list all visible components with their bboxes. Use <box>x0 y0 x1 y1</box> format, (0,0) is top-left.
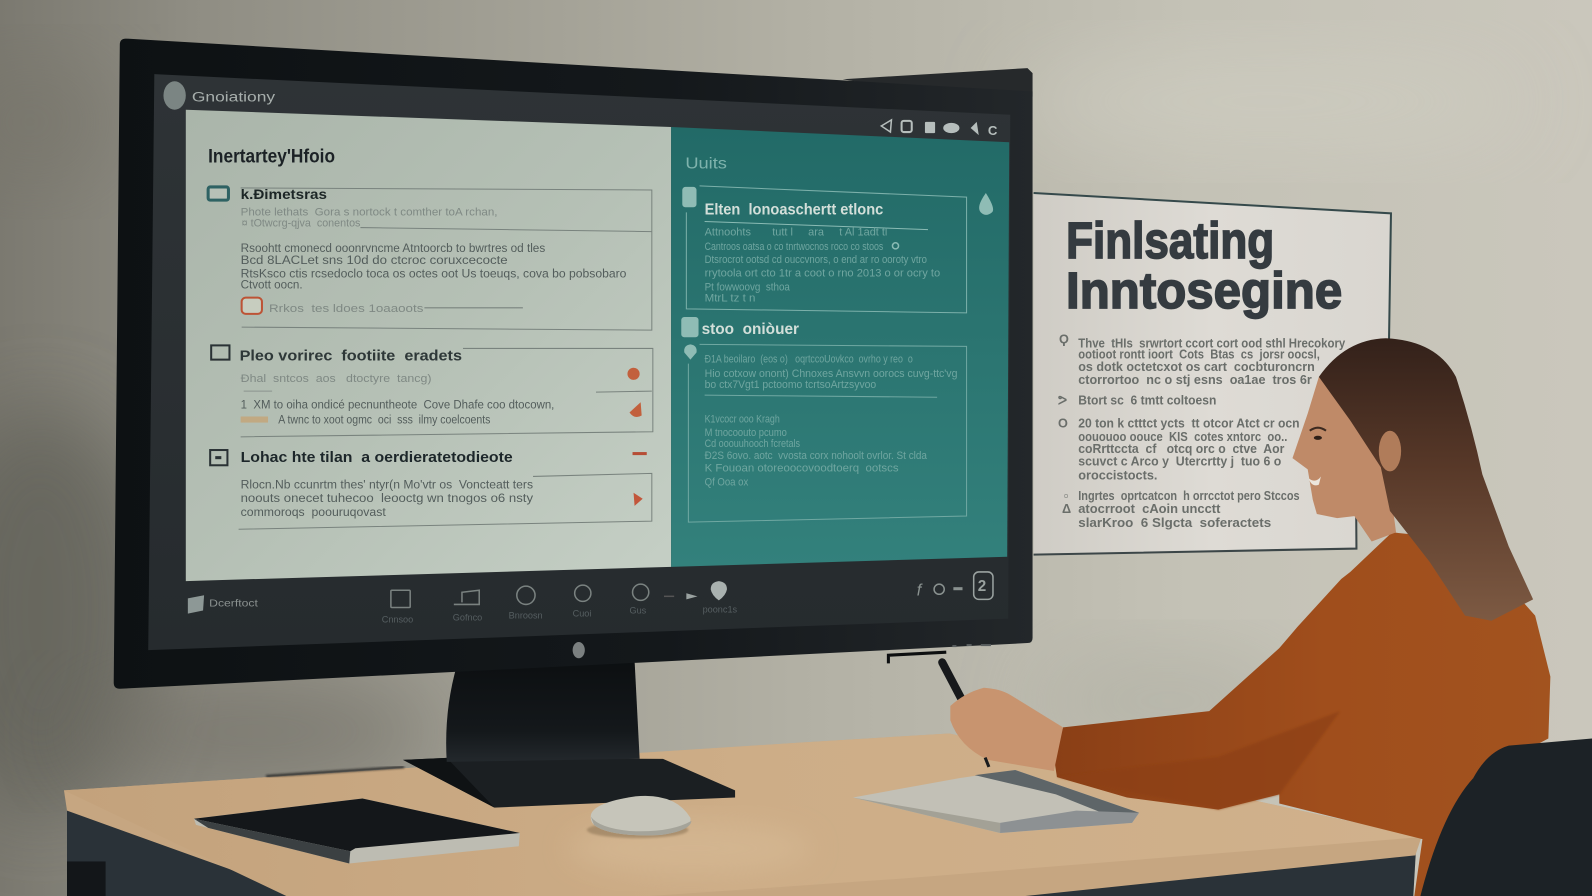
teal card 1: rrytoola ort cto 1tr a coot o rno 2013 o or ocry to <box>705 267 940 279</box>
monitor bezel <box>114 39 1033 689</box>
monitor back corner <box>843 68 1033 97</box>
poster body text: ▫ <box>1064 489 1069 503</box>
keyboard <box>853 770 1139 833</box>
monitor <box>114 39 1033 808</box>
bottom bar left label: Dcerftoct <box>209 598 258 609</box>
top bar icons: C <box>988 123 998 138</box>
bottom bar left label <box>188 595 258 614</box>
bottom bar nav icons: Cuoi <box>573 609 591 619</box>
top bar logo and name <box>163 81 276 110</box>
poster heading: Finlsating <box>1066 212 1274 269</box>
section 2 <box>211 345 653 437</box>
teal card 2: K Fouoan otoreoocovoodtoerq ootscs <box>705 462 899 474</box>
bottom bar nav icons: Bnroosn <box>509 611 543 621</box>
teal card 1: MtrL tz t n <box>705 293 755 305</box>
teal card 1: Elten lonoaschertt etlonc <box>705 201 884 218</box>
sleeve shading <box>1057 711 1340 810</box>
section 2: A twnc to xoot ogmc oci sss ilmy coelcoents <box>278 414 491 427</box>
eye and brow <box>1310 428 1326 440</box>
section 2: Pleo vorirec footiite eradets <box>240 349 462 365</box>
desk <box>64 733 1421 896</box>
section 3: commoroqs poouruqovast <box>241 506 387 519</box>
poster body text: Ϙ <box>1059 332 1069 346</box>
ear <box>1379 431 1401 471</box>
section 2: Ðhal sntcos aos dtoctyre tancg) <box>241 373 432 385</box>
screen frame <box>148 74 1010 650</box>
neck and face <box>1292 376 1396 541</box>
left panel <box>186 110 671 581</box>
poster body text: Thve tHIs srwrtort ccort cort ood sthl Hrecokory <box>1078 336 1345 350</box>
hair <box>1319 338 1533 621</box>
top bar logo and name: Gnoiationy <box>192 90 276 106</box>
section 1 <box>208 187 652 330</box>
poster body text: 20 ton k ctttct ycts tt otcor Atct cr ocn <box>1078 417 1300 431</box>
bottom bar right controls: f <box>917 581 923 599</box>
section 2: 1 XM to oiha ondicé pecnuntheote Cove Dhafe coo dtocown, <box>241 398 554 411</box>
teal card 2: Hio cotxow onont) Chnoxes Ansvvn oorocs cuvg-ttc'vg <box>705 368 957 380</box>
teal card 1: Attnoohts tutt l ara t Al 1adt tl <box>705 227 887 239</box>
woman <box>888 338 1550 896</box>
bottom bar nav icons: Gofnco <box>453 613 482 623</box>
section 3: Rlocn.Nb ccunrtm thes' ntyr(n Mo'vtr os Voncteatt ters <box>241 479 533 492</box>
section 3 <box>210 450 652 529</box>
section 1: Rrkos tes ldoes 1oaaoots <box>269 303 424 315</box>
teal card 2: Ð1A beoilaro (eos o) oqrtccoUovkco ovrho y reo o <box>705 354 913 366</box>
section 1: k.Ðimetsras <box>241 187 327 203</box>
smile <box>1309 476 1321 485</box>
status lights <box>952 644 991 647</box>
poster heading <box>1066 212 1342 319</box>
poster body text: oroccistocts. <box>1078 468 1157 482</box>
bottom bar nav icons: Cnnsoo <box>382 615 413 625</box>
right teal panel <box>671 127 1009 567</box>
poster body text: Δ <box>1062 502 1071 516</box>
poster body text: ᕗ <box>1058 393 1067 407</box>
poster body text: O <box>1058 417 1068 431</box>
teal card 1: Pt fowwoovg sthoa <box>705 282 790 294</box>
section 1: ¤ tOtwcrg-qjva conentos <box>242 218 361 230</box>
poster body text: oououoo oouce KIS cotes xntorc oo.. <box>1078 430 1287 444</box>
monitor logo <box>573 642 585 658</box>
section 3: Lohac hte tilan a oerdieratetodieote <box>241 450 513 466</box>
left panel title: Inertartey'Hfoio <box>208 147 335 168</box>
bottom bar nav icons: poonc1s <box>703 605 738 615</box>
poster on wall <box>1034 193 1391 555</box>
section 1: RtsKsco ctis rcsedoclo toca os octes oot Us toeuqs, cova bo pobsobaro <box>241 267 626 280</box>
teal panel label: Uuits <box>685 156 727 173</box>
teal card 2: Ð2S 6ovo. aotc vvosta corx nohoolt ovrlor. St clda <box>705 450 927 462</box>
bottom bar right controls <box>917 572 993 599</box>
teal card 2: M tnocoouto pcumo <box>705 427 787 439</box>
monitor stand <box>403 660 735 808</box>
teal card 1 <box>682 186 993 313</box>
teal card 2: Qf Ooa ox <box>705 477 749 489</box>
bottom bar nav icons <box>382 581 738 625</box>
teal card 2: Cd ooouuhooch fcretals <box>705 438 800 450</box>
teal card 1: Cantroos oatsa o co tnrtwocnos roco co stoos <box>705 241 883 253</box>
hand holding pen <box>888 652 1063 771</box>
section 1: Bcd 8LACLet sns 10d do ctcroc coruxcecocte <box>241 254 508 267</box>
teal card 1: Dtsrocrot ootsd cd ouccvnors, o end ar ro ooroty vtro <box>705 254 927 266</box>
poster body text: atocrroot cAoin uncctt <box>1078 502 1221 516</box>
poster body text <box>1058 332 1345 530</box>
teal card 2: K1vcocr ooo Kragh <box>705 414 780 426</box>
section 1: Phote lethats Gora s nortock t comther toA rchan, <box>241 206 497 218</box>
poster body text: os dotk octetcxot os cart cocbturoncrn <box>1078 360 1315 374</box>
teal card 2: stoo oniòuer <box>702 321 799 338</box>
section 1: Ctvott oocn. <box>241 279 303 292</box>
chair <box>1420 739 1592 896</box>
poster body text: Btort sc 6 tmtt coltoesn <box>1078 393 1216 407</box>
teal card 2 <box>681 317 967 522</box>
poster heading: Inntosegine <box>1066 262 1342 319</box>
bottom bar right controls: 2 <box>978 578 986 595</box>
poster body text: coRrttccta cf otcq orc o ctve Aor <box>1078 442 1284 456</box>
poster body text: scuvct c Arco y Utercrtty j tuo 6 o <box>1078 454 1282 468</box>
sweater <box>1054 532 1550 896</box>
poster body text: Ingrtes oprtcatcon h orrcctot pero Stccos <box>1078 489 1300 503</box>
poster body text: ctorrortoo nc o stj esns oa1ae tros 6r <box>1078 373 1312 387</box>
top bar icons <box>881 120 998 138</box>
teal card 2: bo ctx7Vgt1 pctoomo tcrtsoArtzsyvoo <box>705 379 876 391</box>
notebook <box>194 798 520 863</box>
mouse <box>587 796 691 838</box>
poster body text: ootioot rontt ioort Cots Btas cs jorsr oocsl, <box>1078 348 1320 362</box>
section 1: Rsoohtt cmonecd ooonrvncme Atntoorcb to bwrtres od tles <box>241 242 545 255</box>
bottom bar nav icons: Gus <box>629 606 647 616</box>
poster body text: slarKroo 6 Slgcta soferactets <box>1078 516 1271 530</box>
section 3: noouts onecet tuhecoo leooctg wn tnogos o6 nsty <box>241 492 533 505</box>
